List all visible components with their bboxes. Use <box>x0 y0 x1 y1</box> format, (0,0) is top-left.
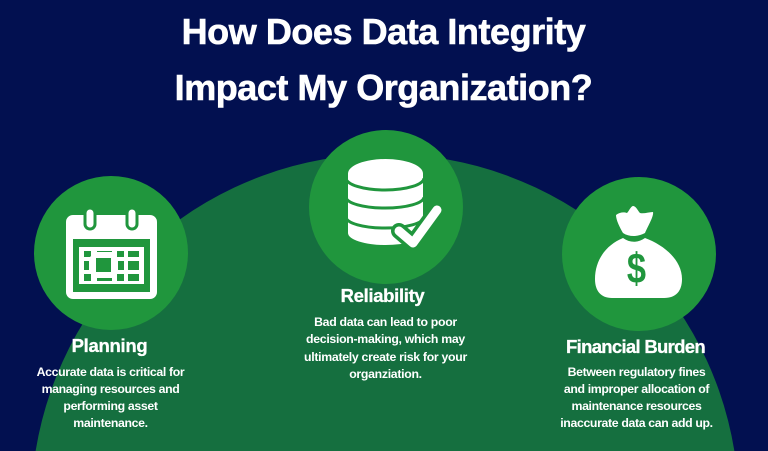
title <box>175 11 592 108</box>
text: planning: maintenance. <box>73 416 148 430</box>
text: financial burden <box>560 364 713 430</box>
title: How Does Data Integrity <box>182 11 585 52</box>
title: Impact My Organization? <box>175 67 592 108</box>
central green arc <box>36 154 734 451</box>
panel: reliability <box>304 285 468 381</box>
text: reliability <box>304 315 468 381</box>
text: planning: performing asset <box>63 398 158 412</box>
text: financial burden: maintenance resources <box>571 398 702 412</box>
heading: financial burden: Financial Burden <box>566 336 705 357</box>
text: reliability: organziation. <box>349 367 422 381</box>
text: planning: managing resources and <box>42 382 179 396</box>
icon: money bag <box>562 177 716 331</box>
text: reliability: Bad data can lead to poor <box>314 315 457 329</box>
icon: database with check <box>309 130 463 284</box>
heading: planning: Planning <box>72 335 147 356</box>
panel: financial burden <box>560 336 713 430</box>
text: reliability: decision-making, which may <box>306 332 465 346</box>
text: financial burden: and improper allocation of <box>564 382 709 396</box>
dollar sign: $ <box>627 245 646 293</box>
panel: planning <box>37 335 184 430</box>
text: planning <box>37 364 184 430</box>
text: financial burden: inaccurate data can add up. <box>560 416 713 430</box>
text: reliability: ultimately create risk for your <box>304 350 467 364</box>
text: financial burden: Between regulatory fines <box>568 364 705 378</box>
text: planning: Accurate data is critical for <box>37 364 184 378</box>
heading: reliability: Reliability <box>341 285 424 306</box>
icon: calendar <box>34 176 188 330</box>
